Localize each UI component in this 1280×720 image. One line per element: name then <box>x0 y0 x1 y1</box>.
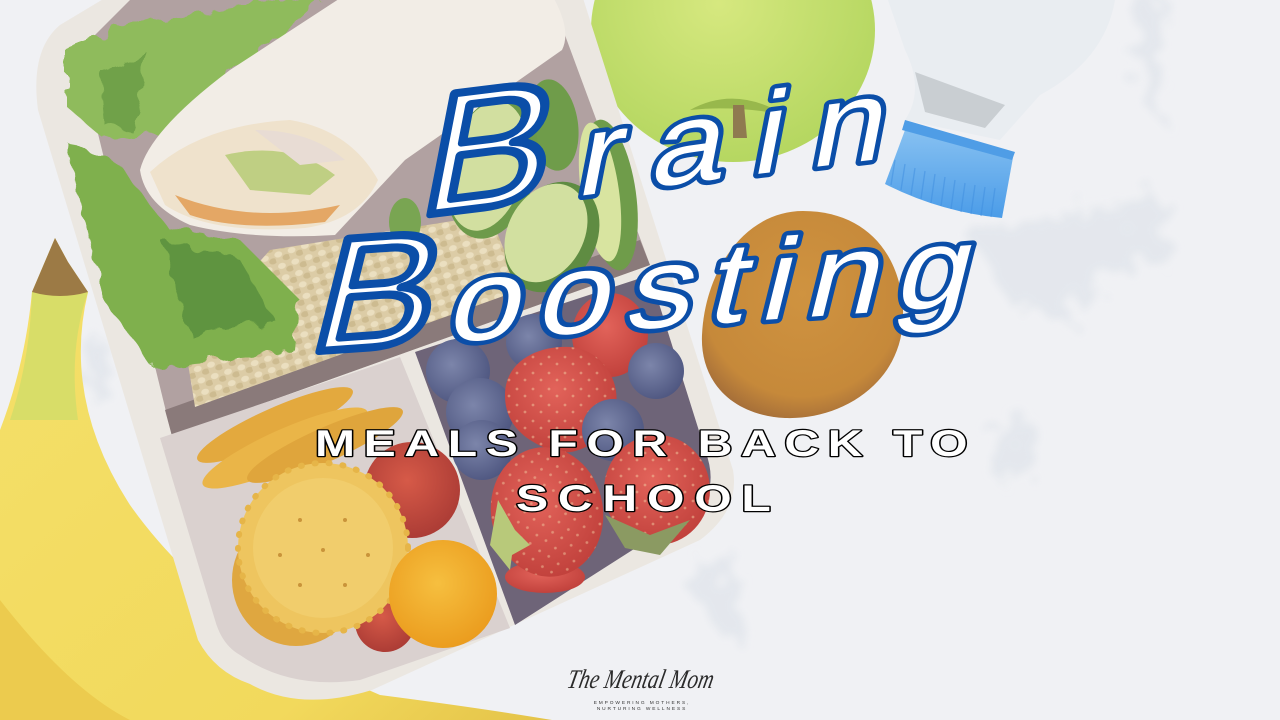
photo: wrap sandwich <box>140 0 565 236</box>
logo: The Mental Mom: EMPOWERING MOTHERS, <box>594 700 690 706</box>
photo: lunchbox tray <box>36 0 734 700</box>
photo: water bottle <box>885 0 1115 218</box>
title: Brain: Brain <box>408 0 912 253</box>
subtitle line 2: SCHOOL <box>516 478 771 520</box>
cracker compartment <box>160 357 510 682</box>
photo: cucumber slices <box>389 76 646 309</box>
logo: The Mental Mom <box>565 664 717 712</box>
logo: The Mental Mom: NURTURING WELLNESS <box>597 706 687 712</box>
logo: The Mental Mom: The Mental Mom <box>565 664 717 694</box>
title: Boosting: Boosting <box>296 159 1001 387</box>
photo: apple <box>591 0 875 162</box>
berry compartment <box>415 275 711 625</box>
photo: berries <box>426 293 710 593</box>
top compartment <box>78 0 650 436</box>
photo: muffin <box>702 211 903 418</box>
photo: grain bar <box>185 215 520 407</box>
photo: crackers and tomatoes <box>190 375 497 652</box>
subtitle line 1: MEALS FOR BACK TO <box>315 423 968 465</box>
photo: banana <box>0 238 552 720</box>
photo: lettuce <box>65 0 320 365</box>
